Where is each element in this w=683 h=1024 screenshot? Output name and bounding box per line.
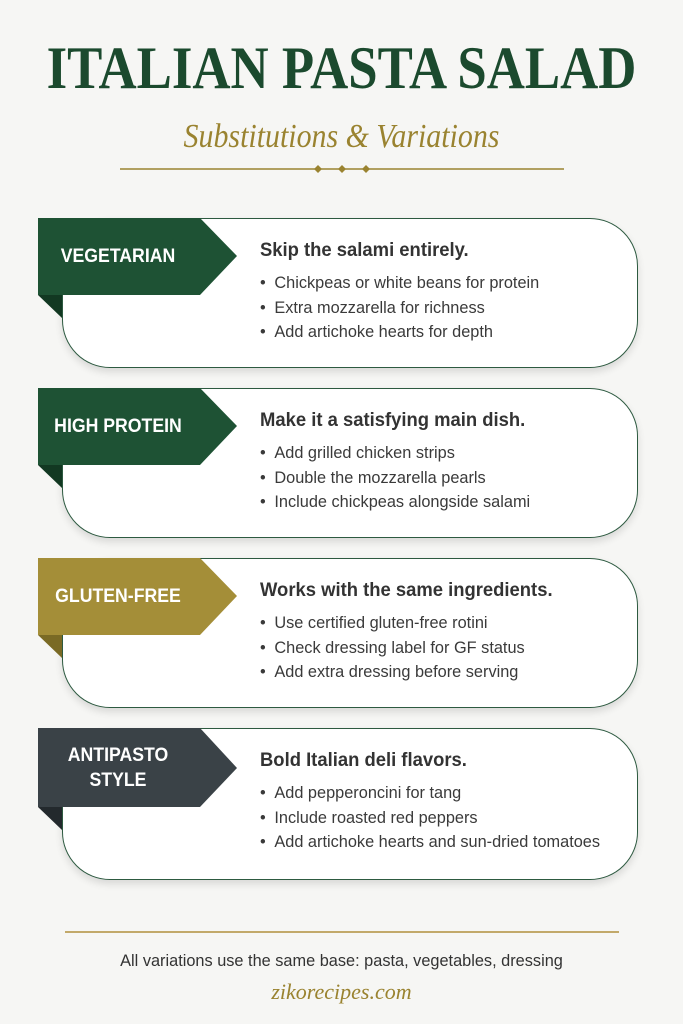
- text: vegetarian: Skip the salami entirely.: [260, 240, 469, 261]
- panel: high protein: [38, 388, 640, 544]
- text: antipasto style: Add artichoke hearts and sun-dried tomatoes: [274, 832, 600, 851]
- panel: antipasto style: [38, 728, 640, 886]
- text: high protein: [260, 410, 530, 511]
- panel: gluten-free: [38, 558, 640, 714]
- panel: vegetarian: [38, 218, 640, 374]
- text: antipasto style: Add pepperoncini for tang: [274, 783, 461, 802]
- text: vegetarian: Chickpeas or white beans for protein: [274, 273, 539, 292]
- text: antipasto style: [260, 750, 600, 851]
- text: gluten-free: Add extra dressing before serving: [274, 662, 518, 681]
- subtitle: Substitutions & Variations: [184, 118, 499, 155]
- text: vegetarian: Extra mozzarella for richness: [274, 298, 485, 316]
- text: gluten-free: [260, 580, 553, 681]
- panel: antipasto style: ANTIPASTO: [68, 744, 168, 766]
- panel: high protein: HIGH PROTEIN: [54, 416, 182, 437]
- text: high protein: Add grilled chicken strips: [274, 443, 455, 462]
- text: gluten-free: Works with the same ingredients.: [260, 580, 553, 601]
- panel: vegetarian: VEGETARIAN: [61, 246, 175, 267]
- divider ornament: [120, 165, 564, 173]
- footer note: All variations use the same base: pasta, vegetables, dressing: [120, 951, 563, 970]
- footer line: [65, 931, 619, 933]
- text: gluten-free: Use certified gluten-free rotini: [274, 613, 488, 632]
- text: high protein: Include chickpeas alongside salami: [274, 492, 530, 511]
- banner: antipasto style: [38, 728, 237, 830]
- footer url: zikorecipes.com: [271, 979, 412, 1004]
- text: gluten-free: Check dressing label for GF status: [274, 638, 525, 656]
- text: antipasto style: Bold Italian deli flavors.: [260, 750, 467, 771]
- panel: antipasto style: STYLE: [90, 770, 146, 790]
- panel: gluten-free: GLUTEN-FREE: [55, 586, 181, 607]
- banner: gluten-free: [38, 558, 237, 658]
- title: ITALIAN PASTA SALAD: [47, 35, 636, 101]
- text: vegetarian: Add artichoke hearts for depth: [274, 322, 493, 341]
- text: antipasto style: Include roasted red peppers: [274, 808, 478, 826]
- text: high protein: Double the mozzarella pearls: [274, 468, 486, 486]
- text: high protein: Make it a satisfying main dish.: [260, 410, 525, 431]
- text: vegetarian: [260, 240, 539, 341]
- banner: high protein: [38, 388, 237, 488]
- banner: vegetarian: [38, 218, 237, 318]
